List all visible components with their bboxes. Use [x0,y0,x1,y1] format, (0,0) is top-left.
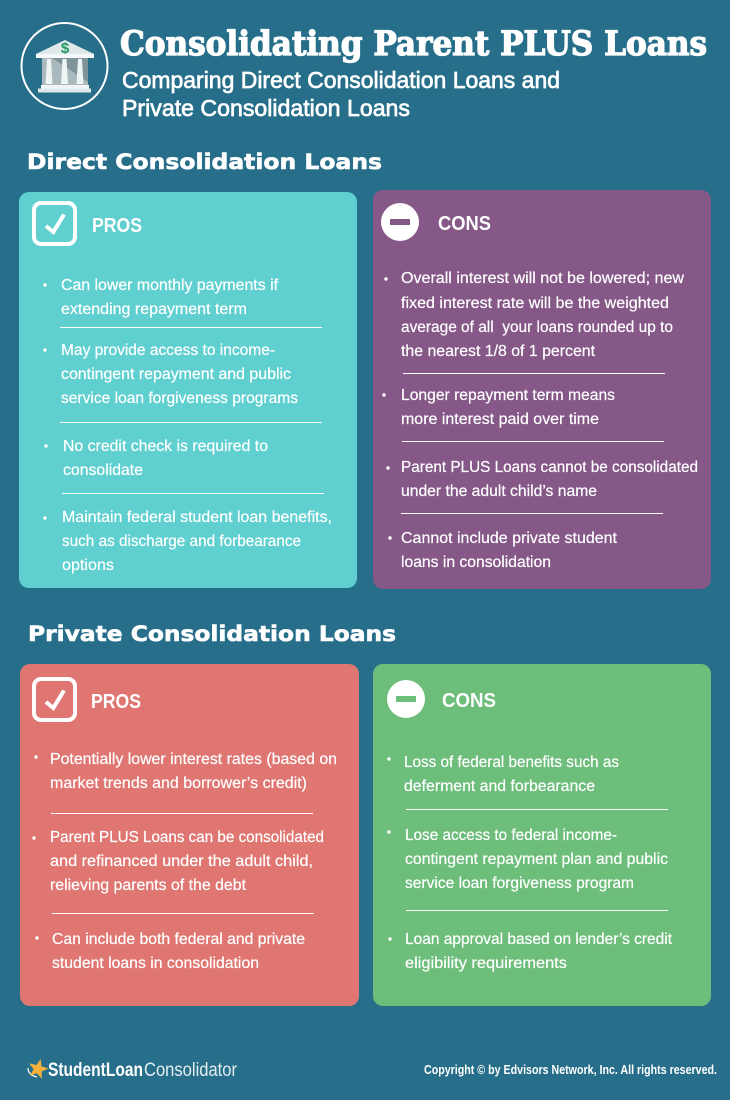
panel: direct cons [373,190,711,589]
bullet list: service loan forgiveness program [405,875,634,892]
bullet list: consolidate [63,462,143,479]
heading: direct consolidation loans: Direct Consolidation Loans [27,150,382,175]
bullet list: Overall interest will not be lowered; new [401,270,685,287]
bullet list: market trends and borrower’s credit) [50,775,307,792]
bullet list: the nearest 1/8 of 1 percent [401,343,596,360]
bullet list: Loss of federal benefits such as [404,754,619,771]
bullet list: Potentially lower interest rates (based on [50,751,337,768]
bullet list: student loans in consolidation [52,955,259,972]
bullet list: No credit check is required to [63,438,268,455]
bullet list: more interest paid over time [401,411,599,428]
bullet list: Lose access to federal income- [405,827,617,844]
bullet list: contingent repayment and public [61,366,291,383]
bullet list: Can include both federal and private [52,931,305,948]
subtitle: Comparing Direct Consolidation Loans and [122,67,560,93]
bullet list: extending repayment term [61,301,247,318]
bullet list: service loan forgiveness programs [61,390,298,407]
bullet list: under the adult child’s name [401,483,597,500]
bullet list: deferment and forbearance [404,778,595,795]
icon: check box [34,679,75,720]
bullet list [382,270,698,571]
bullet list: Loan approval based on lender’s credit [405,931,673,948]
bullet list: loans in consolidation [401,554,551,571]
bullet list: average of all your loans rounded up to [401,319,673,336]
bullet list: Can lower monthly payments if [61,277,279,294]
bullet list: and refinanced under the adult child, [50,853,313,870]
bullet list [32,751,337,972]
footer logo [26,1056,238,1081]
panel: private pros [20,664,359,1006]
footer logo: Consolidator [144,1060,238,1081]
bullet list: fixed interest rate will be the weighted [401,295,669,312]
heading: cons: CONS [442,690,496,712]
subtitle [122,67,560,121]
bullet list: Parent PLUS Loans can be consolidated [50,829,324,846]
heading: pros: PROS [92,215,142,237]
bullet list: such as discharge and forbearance [62,533,301,550]
icon: check box [34,203,75,244]
panel: direct pros [19,192,357,588]
panel: private cons [373,664,711,1006]
bullet list: Longer repayment term means [401,387,615,404]
icon: minus circle [387,680,425,718]
subtitle: Private Consolidation Loans [122,95,410,121]
bullet list: options [62,557,114,574]
bullet list: contingent repayment plan and public [405,851,668,868]
footer logo: StudentLoan [48,1060,143,1081]
bullet list: eligibility requirements [405,955,567,972]
bullet list: relieving parents of the debt [50,877,247,894]
bullet list: Maintain federal student loan benefits, [62,509,332,526]
bullet list [43,277,332,574]
bullet list: Parent PLUS Loans cannot be consolidated [401,459,698,476]
bullet list: Cannot include private student [401,530,618,547]
heading: pros: PROS [91,691,141,713]
icon: minus circle [381,203,419,241]
heading: cons: CONS [438,213,491,235]
icon: bank in circle [22,23,108,109]
bullet list: May provide access to income- [61,342,275,359]
icon: bank in circle: $ [61,40,70,57]
heading: private consolidation loans: Private Consolidation Loans [28,622,396,647]
bullet list [387,754,673,972]
